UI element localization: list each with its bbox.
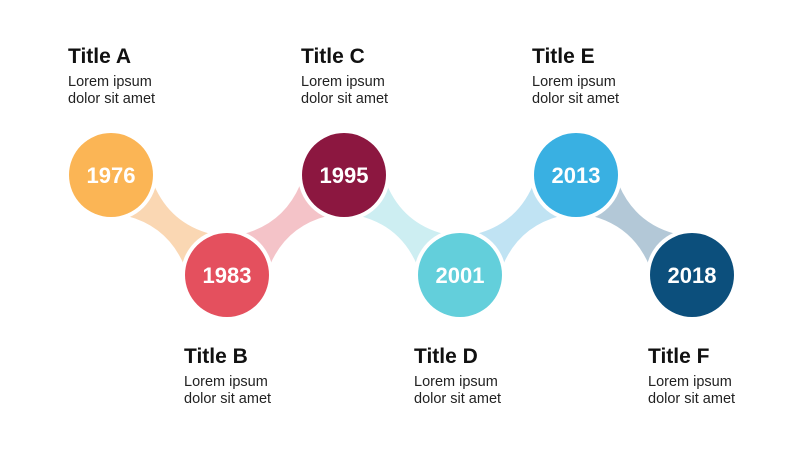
circle 1983: 1983 [203,263,251,288]
label C: Lorem ipsum [301,74,385,90]
label E [532,45,619,107]
circle 1976: 1976 [87,163,135,188]
label D: dolor sit amet [414,391,501,407]
label F: Title F [648,345,709,368]
circle 1983 [181,229,273,321]
label C: dolor sit amet [301,91,388,107]
label D: Title D [414,345,478,368]
connector B-C [243,185,327,265]
label A [68,45,155,107]
label B: Title B [184,345,248,368]
circle 2001: 2001 [436,263,484,288]
connector E-F [592,185,676,265]
label B [184,345,271,407]
circle 1995: 1995 [320,163,368,188]
label E: Title E [532,45,595,68]
label F: dolor sit amet [648,391,735,407]
label B: dolor sit amet [184,391,271,407]
circle 1995 [298,129,390,221]
label F: Lorem ipsum [648,374,732,390]
label A: Lorem ipsum [68,74,152,90]
label A: Title A [68,45,131,68]
circle 2018: 2018 [668,263,716,288]
label E: Lorem ipsum [532,74,616,90]
label F [648,345,735,407]
label A: dolor sit amet [68,91,155,107]
label E: dolor sit amet [532,91,619,107]
circle 2001 [414,229,506,321]
connector C-D [360,185,444,265]
circle 2013 [530,129,622,221]
label D: Lorem ipsum [414,374,498,390]
label B: Lorem ipsum [184,374,268,390]
connector D-E [476,185,560,265]
connector A-B [127,185,211,265]
circle 2018 [646,229,738,321]
label D [414,345,501,407]
label C [301,45,388,107]
circle 2013: 2013 [552,163,600,188]
circle 1976 [65,129,157,221]
label C: Title C [301,45,365,68]
